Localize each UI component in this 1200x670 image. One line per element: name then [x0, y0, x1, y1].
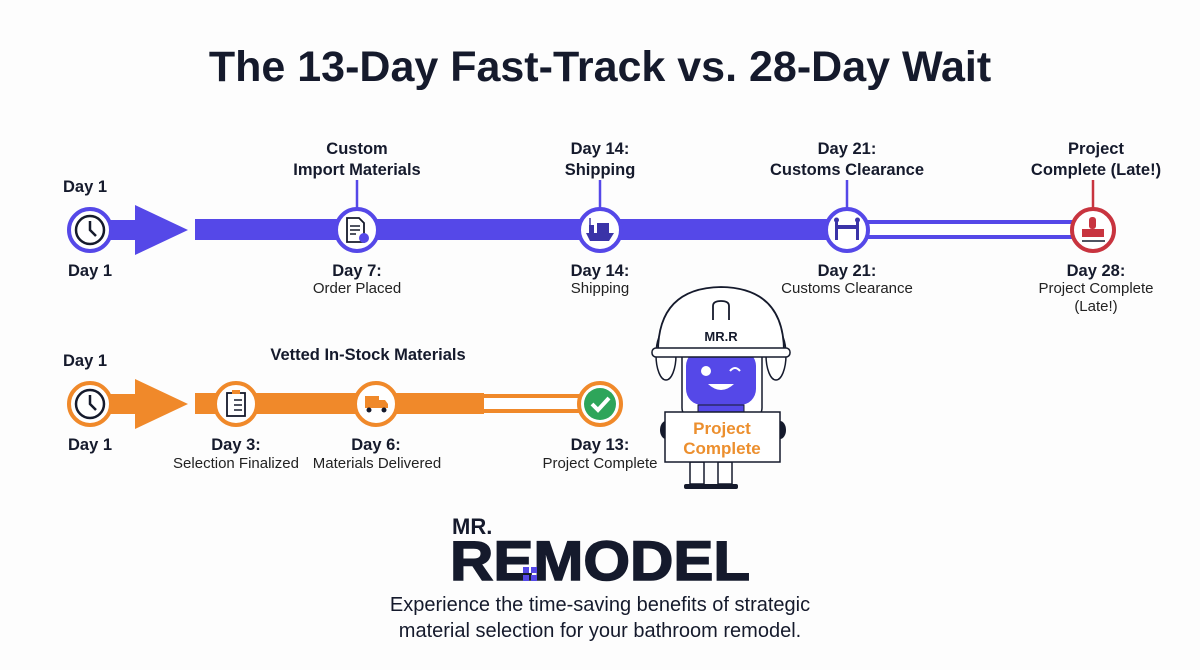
bar: purple solid: [195, 219, 832, 240]
labels: bottom row: Day 1: [68, 436, 112, 454]
icon: customs barrier: [826, 209, 868, 251]
sign: project complete: [665, 412, 780, 462]
title: The 13-Day Fast-Track vs. 28-Day Wait: [209, 43, 991, 91]
labels: top row: Project: [1068, 140, 1124, 158]
mascot: robot holding sign: MR.R: [704, 329, 738, 344]
labels: top row: Day 21:: [818, 262, 876, 280]
timeline: custom import (purple): [63, 140, 1161, 315]
icon: ship: [579, 209, 621, 251]
labels: top row: Custom: [326, 140, 388, 158]
icon: truck: [355, 383, 397, 425]
icon: checklist: [215, 383, 257, 425]
arrow: purple start: [100, 205, 188, 255]
bar: purple hollow remainder: [862, 222, 1077, 237]
logo: MR. REMODEL: MR.: [452, 514, 492, 539]
labels: bottom row: Day 1: [63, 352, 107, 370]
labels: top row: Customs Clearance: [781, 280, 913, 297]
labels: top row: Customs Clearance: [770, 161, 924, 179]
bar: orange solid: [195, 393, 484, 414]
arrow: orange start: [100, 379, 188, 429]
icon: stamp red: [1072, 209, 1114, 251]
tagline: Experience the time-saving benefits of strategic: [390, 594, 810, 616]
labels: top row: Day 1: [68, 262, 112, 280]
sign: project complete: Project: [693, 419, 751, 438]
labels: top row: Project Complete: [1038, 280, 1154, 297]
bar: orange hollow remainder: [482, 396, 582, 411]
labels: bottom row: Day 13:: [571, 436, 629, 454]
labels: bottom row: Selection Finalized: [173, 455, 299, 472]
labels: top row: (Late!): [1074, 298, 1118, 315]
labels: top row: Day 14:: [571, 140, 629, 158]
timeline: in-stock (orange): [63, 346, 658, 472]
labels: top row: Import Materials: [293, 161, 421, 179]
tagline: [390, 594, 810, 642]
labels: top row: [63, 140, 1161, 315]
labels: bottom row: Materials Delivered: [313, 455, 441, 472]
icon: green check: [579, 383, 621, 425]
labels: bottom row: Vetted In-Stock Materials: [270, 346, 466, 364]
logo: MR. REMODEL: REMODEL: [450, 529, 750, 592]
tagline: material selection for your bathroom remodel.: [399, 620, 801, 642]
mascot: robot holding sign: [652, 287, 790, 489]
labels: top row: Shipping: [565, 161, 635, 179]
labels: top row: Shipping: [571, 280, 629, 297]
labels: top row: Day 7:: [332, 262, 382, 280]
labels: top row: Order Placed: [313, 280, 401, 297]
sign: project complete: Complete: [683, 439, 761, 458]
labels: top row: Day 21:: [818, 140, 876, 158]
labels: top row: Complete (Late!): [1031, 161, 1161, 179]
icon: clock orange: [69, 383, 111, 425]
labels: bottom row: Day 6:: [351, 436, 401, 454]
icon: clock purple: [69, 209, 111, 251]
labels: top row: Day 1: [63, 178, 107, 196]
labels: top row: Day 28:: [1067, 262, 1125, 280]
labels: bottom row: Day 3:: [211, 436, 261, 454]
labels: bottom row: [63, 346, 658, 472]
labels: bottom row: Project Complete: [542, 455, 658, 472]
labels: top row: Day 14:: [571, 262, 629, 280]
icon: document: [336, 209, 378, 251]
